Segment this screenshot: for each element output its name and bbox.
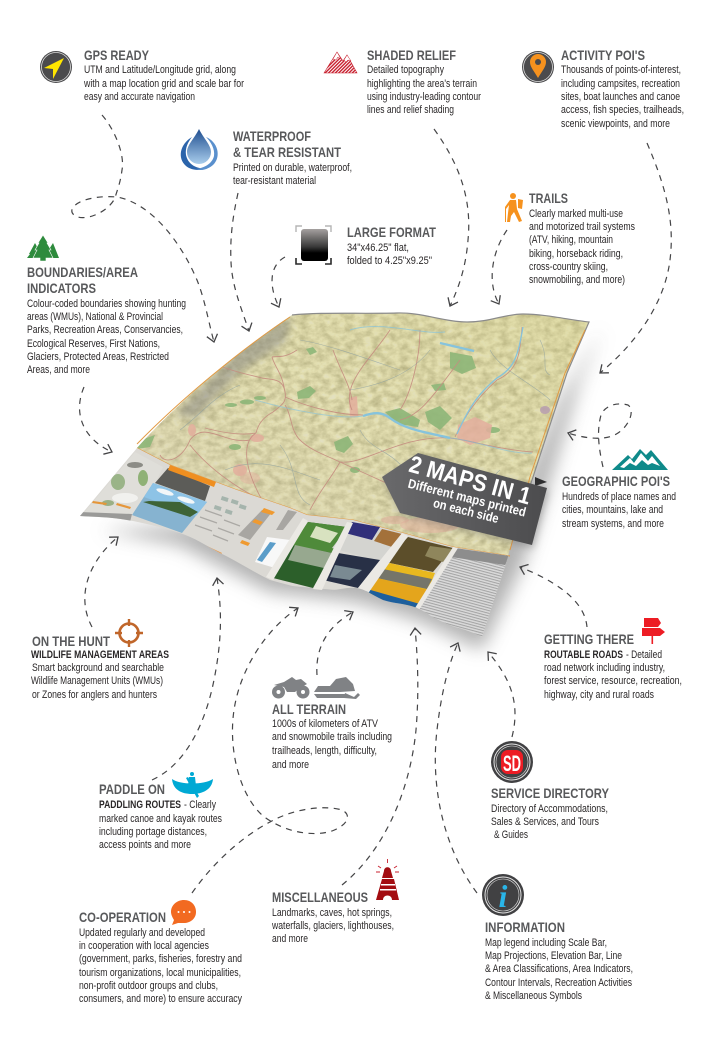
- text block: and motorized trail systems: [529, 221, 635, 233]
- arrow: all terrain to map: [317, 612, 353, 675]
- text block: highway, city and rural roads: [544, 689, 654, 701]
- text block: or Zones for anglers and hunters: [32, 689, 157, 701]
- text block: PADDLING ROUTES: [99, 799, 181, 811]
- text block: (government, parks, fisheries, forestry and: [79, 953, 242, 965]
- panel: trails: [505, 190, 635, 286]
- text block: [272, 718, 392, 771]
- icon: crosshair: [115, 619, 143, 647]
- icon: info badge: [482, 874, 524, 916]
- heading: [233, 128, 341, 160]
- text block: cross-country skiing,: [529, 261, 608, 273]
- arrow: getting there to map: [520, 567, 587, 627]
- heading: TRAILS: [529, 190, 568, 206]
- pink parks: [188, 396, 550, 533]
- heading: MISCELLANEOUS: [272, 889, 368, 905]
- text block: highlighting the area's terrain: [367, 78, 477, 90]
- heading: BOUNDARIES/AREA: [27, 264, 138, 280]
- map: folded map illustration: [75, 305, 603, 650]
- icon: lighthouse: [376, 859, 399, 900]
- arrow: trails to map: [492, 230, 507, 304]
- text block: Wildlife Management Units (WMUs): [31, 675, 163, 687]
- heading: ACTIVITY POI'S: [561, 47, 645, 63]
- arrow: large format to map: [272, 257, 285, 307]
- text block: (ATV, hiking, mountain: [529, 234, 613, 246]
- 2 maps in 1 banner: on each side: [432, 495, 500, 526]
- panel: boundaries: [27, 235, 186, 376]
- text block: [562, 491, 676, 530]
- table panel: [417, 548, 510, 640]
- arrow: boundaries to map: [80, 387, 112, 452]
- text block: [561, 64, 684, 130]
- text block: Map Projections, Elevation Bar, Line: [485, 950, 622, 962]
- heading: PADDLE ON: [99, 781, 165, 797]
- text block: road network including industry,: [544, 662, 665, 674]
- text block: areas (WMUs), National & Provincial: [27, 311, 163, 323]
- arrow: activity POIs to map: [600, 143, 671, 373]
- text block: access points and more: [99, 839, 191, 851]
- text block: [544, 649, 682, 701]
- photo panel: [132, 483, 207, 533]
- arrow: paddle on to map: [152, 578, 220, 780]
- text block: [233, 162, 352, 187]
- arrow: waterproof to map: [231, 193, 249, 331]
- fold shading: [175, 315, 292, 418]
- heading: [27, 264, 138, 296]
- yellow advert: [378, 563, 435, 590]
- text block: Ecological Reserves, First Nations,: [27, 338, 160, 350]
- text block: biking, horseback riding,: [529, 248, 623, 260]
- text block: Clearly marked multi-use: [529, 208, 623, 220]
- text block: - Clearly: [184, 799, 216, 811]
- text block: scenic viewpoints, and more: [561, 118, 670, 130]
- heading: ON THE HUNT: [32, 633, 110, 649]
- map drop shadow: [100, 328, 603, 650]
- text block: [529, 208, 635, 286]
- text block: ROUTABLE ROADS: [544, 649, 623, 661]
- icon: orange pin: [522, 51, 554, 83]
- panel: service directory: [491, 741, 610, 841]
- protected green areas: [135, 347, 500, 473]
- text block: [485, 937, 633, 1002]
- panel: all terrain: [272, 677, 392, 771]
- text block: Landmarks, caves, hot springs,: [272, 907, 392, 919]
- arrow: co-operation to map: [192, 608, 347, 893]
- panel: shaded relief: [324, 47, 481, 116]
- text block: - Detailed: [626, 649, 662, 661]
- map outer border: [292, 313, 589, 540]
- text block: Sales & Services, and Tours: [491, 816, 599, 828]
- text block: tear-resistant material: [233, 175, 316, 187]
- text block: stream systems, and more: [562, 518, 664, 530]
- text block: including portage distances,: [99, 826, 207, 838]
- rivers and lakes: [255, 327, 532, 453]
- heading: WATERPROOF: [233, 128, 311, 144]
- panel: information: [482, 874, 633, 1002]
- night sky advert: [332, 540, 338, 548]
- panel: waterproof: [181, 128, 352, 187]
- text block: using industry-leading contour: [367, 91, 481, 103]
- arrow: GPS ready to map: [72, 115, 214, 342]
- text block: Directory of Accommodations,: [491, 803, 608, 815]
- text block: cities, mountains, lake and: [562, 504, 663, 516]
- text block: and snowmobile trails including: [272, 731, 392, 743]
- arrow: on the hunt to map: [85, 537, 118, 627]
- panel: activity POIs: [522, 47, 684, 130]
- text block: [79, 927, 242, 1005]
- text block: snowmobiling, and more): [529, 274, 625, 286]
- text block: 34"x46.25" flat,: [347, 242, 409, 254]
- legend panel accents: [214, 496, 247, 515]
- white mountain advert: [323, 553, 380, 588]
- arrow: miscellaneous to map: [342, 628, 418, 885]
- map front sheet: [137, 314, 588, 556]
- icon: info badge: i: [499, 878, 508, 914]
- arrow: information to map: [435, 643, 477, 893]
- text block: [83, 64, 244, 103]
- text block: & Guides: [494, 829, 528, 841]
- text block: tourism organizations, local municipalities,: [79, 967, 241, 979]
- text block: Glaciers, Protected Areas, Restricted: [27, 351, 169, 363]
- icon: water drop: [181, 129, 218, 170]
- text block: [27, 298, 186, 376]
- icon: ATV and snowmobile: [272, 677, 360, 699]
- text block: lines and relief shading: [367, 104, 454, 116]
- icon: sheet with corner brackets: [296, 226, 331, 264]
- text block: in cooperation with local agencies: [79, 940, 209, 952]
- heading: ALL TERRAIN: [272, 701, 346, 717]
- arrow: service directory to map: [488, 652, 515, 737]
- icon: SD badge: SD: [503, 751, 521, 776]
- text block: waterfalls, glaciers, lighthouses,: [271, 920, 394, 932]
- heading: GPS READY: [84, 47, 150, 63]
- panel: large format: [296, 224, 436, 267]
- text block: Map legend including Scale Bar,: [485, 937, 607, 949]
- heading: GETTING THERE: [544, 631, 634, 647]
- thin streams: [180, 340, 550, 505]
- panel: geographic POIs: [562, 449, 676, 530]
- brown advert: [385, 537, 453, 572]
- heading: INDICATORS: [27, 280, 96, 296]
- icon: compass arrow: [40, 51, 72, 83]
- bottom guide panels: [75, 448, 510, 640]
- 2 maps in 1 banner: Different maps printed: [407, 476, 528, 520]
- 2 maps in 1 banner: [382, 451, 548, 548]
- text block: Colour-coded boundaries showing hunting: [27, 298, 186, 310]
- icon: canoe: [172, 772, 213, 798]
- text block: Smart background and searchable: [32, 662, 164, 674]
- arrow: geographic POIs to map: [568, 404, 631, 467]
- heading: SERVICE DIRECTORY: [491, 785, 610, 801]
- icon: red mountains: [324, 52, 357, 73]
- icon: speech bubble: [171, 900, 196, 925]
- text block: UTM and Latitude/Longitude grid, along: [84, 64, 236, 76]
- panel: miscellaneous: [271, 859, 399, 945]
- text block: Detailed topography: [367, 64, 444, 76]
- icon: pine trees: [27, 235, 59, 261]
- text block: Areas, and more: [27, 364, 90, 376]
- text block: consumers, and more) to ensure accuracy: [79, 993, 242, 1005]
- text block: & Area Classifications, Area Indicators,: [485, 963, 633, 975]
- panel: getting there: [544, 618, 682, 701]
- text block: Hundreds of place names and: [562, 491, 676, 503]
- text block: [271, 907, 394, 945]
- icon: teal mountains: [612, 449, 668, 470]
- icon: red signpost: [642, 618, 665, 644]
- roads: [160, 327, 533, 510]
- text block: trailheads, length, difficulty,: [272, 745, 377, 757]
- arrow: shaded relief to map: [434, 129, 469, 306]
- heading: INFORMATION: [485, 919, 565, 935]
- text block: [367, 64, 481, 116]
- heading: CO-OPERATION: [79, 909, 166, 925]
- text block: [31, 649, 169, 701]
- text block: [99, 799, 222, 851]
- text block: & Miscellaneous Symbols: [485, 990, 582, 1002]
- text block: marked canoe and kayak routes: [99, 813, 222, 825]
- map orange side lines: [137, 317, 585, 556]
- text block: [347, 242, 432, 267]
- fold strips: [266, 518, 458, 610]
- heading: GEOGRAPHIC POI'S: [562, 473, 670, 489]
- text block: Printed on durable, waterproof,: [233, 162, 352, 174]
- text block: 1000s of kilometers of ATV: [272, 718, 379, 730]
- text block: and more: [272, 933, 308, 945]
- text block: WILDLIFE MANAGEMENT AREAS: [31, 649, 169, 661]
- text block: and more: [272, 759, 309, 771]
- text block: Updated regularly and developed: [79, 927, 205, 939]
- panel: on the hunt: [31, 619, 169, 701]
- panel: GPS ready: [40, 47, 244, 103]
- thumbnail map area: [82, 452, 163, 515]
- text block: [491, 803, 608, 841]
- text block: Parks, Recreation Areas, Conservancies,: [27, 324, 183, 336]
- text block: with a map location grid and scale bar for: [83, 78, 244, 90]
- text block: easy and accurate navigation: [84, 91, 195, 103]
- green advert: [273, 522, 347, 588]
- text block: non-profit outdoor groups and clubs,: [79, 980, 218, 992]
- panel: paddle on: [99, 772, 222, 851]
- panel: co-operation: [79, 900, 242, 1005]
- heading: LARGE FORMAT: [347, 224, 436, 240]
- text block: folded to 4.25"x9.25": [347, 255, 432, 267]
- icon: hiker: [505, 193, 523, 222]
- text block: Contour Intervals, Recreation Activities: [485, 977, 632, 989]
- heading: & TEAR RESISTANT: [233, 144, 341, 160]
- heading: SHADED RELIEF: [367, 47, 456, 63]
- 2 maps in 1 banner: 2 MAPS IN 1: [406, 451, 534, 510]
